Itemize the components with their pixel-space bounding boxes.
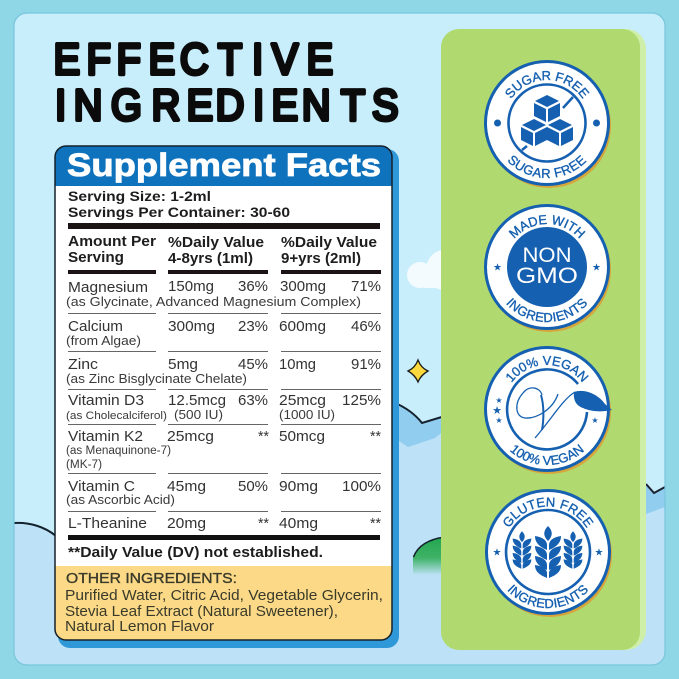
row: zinc: 45% bbox=[238, 356, 268, 373]
serving info bbox=[68, 188, 290, 220]
badge: vegan: 100% VEGAN bbox=[510, 444, 584, 466]
icon: crossed-out sugar cubes bbox=[521, 95, 573, 150]
other ingredients: Natural Lemon Flavor bbox=[65, 618, 214, 635]
icon: stars: ★ bbox=[492, 405, 502, 417]
panel: supplement facts label bbox=[55, 146, 399, 648]
row: l-theanine bbox=[68, 515, 381, 532]
badge: non gmo: ★ bbox=[592, 262, 601, 274]
badge: non gmo: MADE WITH bbox=[508, 214, 586, 238]
row: zinc: 5mg bbox=[168, 356, 198, 373]
row: vitamin k2: Vitamin K2 bbox=[68, 428, 143, 445]
badge: non gmo bbox=[484, 204, 611, 332]
row: calcium: 600mg bbox=[279, 318, 326, 335]
row: l-theanine: ** bbox=[370, 515, 381, 532]
badge: sugar free: SUGAR FREE bbox=[508, 154, 587, 178]
row: l-theanine: ** bbox=[258, 515, 269, 532]
row: magnesium: 150mg bbox=[168, 278, 214, 295]
table header: Amount Per bbox=[68, 233, 156, 250]
badge: non gmo: NON bbox=[522, 244, 571, 267]
panel: green badges column bbox=[441, 29, 646, 650]
badge: non gmo: GMO bbox=[516, 263, 578, 288]
hill bbox=[413, 538, 441, 574]
row: zinc bbox=[66, 356, 381, 386]
badge: sugar free: SUGAR FREE bbox=[506, 70, 590, 99]
heading: supplement facts: Supplement Facts bbox=[67, 147, 381, 183]
row: calcium: 300mg bbox=[168, 318, 215, 335]
icon: v with leaf bbox=[517, 388, 612, 438]
other ingredients: Stevia Leaf Extract (Natural Sweetener), bbox=[65, 603, 338, 620]
serving info: Servings Per Container: 30-60 bbox=[68, 204, 290, 220]
row: vitamin d3: (as Cholecalciferol) bbox=[66, 410, 167, 422]
other ingredients: Purified Water, Citric Acid, Vegetable Glycerin, bbox=[65, 587, 383, 604]
row: vitamin d3: (500 IU) bbox=[174, 407, 223, 422]
title: EFFECTIVE bbox=[54, 34, 333, 83]
table header: %Daily Value bbox=[281, 234, 377, 251]
badge: non gmo: INGREDIENTS bbox=[506, 298, 587, 322]
row: zinc: 10mg bbox=[279, 356, 316, 373]
row: vitamin k2: 50mcg bbox=[279, 428, 325, 445]
row: magnesium bbox=[66, 278, 381, 309]
title bbox=[54, 34, 398, 129]
row: zinc: 91% bbox=[351, 356, 381, 373]
row: vitamin d3: 12.5mcg bbox=[168, 392, 226, 409]
icon: stars bbox=[492, 396, 599, 425]
row: calcium: (from Algae) bbox=[66, 333, 141, 348]
row: vitamin c: 45mg bbox=[167, 478, 206, 495]
badge: vegan bbox=[484, 346, 612, 474]
row: vitamin c: Vitamin C bbox=[68, 478, 135, 495]
row: calcium: 23% bbox=[238, 318, 268, 335]
badge: sugar free bbox=[484, 60, 611, 188]
table header: %Daily Value bbox=[168, 234, 264, 251]
row: vitamin c: (as Ascorbic Acid) bbox=[66, 492, 175, 507]
row: vitamin d3: 25mcg bbox=[279, 392, 326, 409]
row: magnesium: 71% bbox=[351, 278, 381, 295]
row: magnesium: 36% bbox=[238, 278, 268, 295]
row: magnesium: Magnesium bbox=[68, 279, 148, 296]
row: vitamin d3: 63% bbox=[238, 392, 268, 409]
other ingredients bbox=[65, 570, 383, 635]
row: vitamin k2: 25mcg bbox=[167, 428, 214, 445]
footnote: **Daily Value (DV) not established. bbox=[68, 544, 323, 561]
table header: Serving bbox=[68, 249, 124, 266]
other ingredients: OTHER INGREDIENTS: bbox=[66, 570, 237, 587]
badge: gluten free: INGREDIENTS bbox=[508, 584, 588, 608]
title: INGREDIENTS bbox=[55, 80, 398, 129]
row: vitamin k2: (MK-7) bbox=[66, 459, 102, 471]
row: magnesium: 300mg bbox=[280, 278, 326, 295]
icon: stars: ★ bbox=[495, 416, 503, 425]
table header bbox=[68, 233, 377, 267]
row: vitamin d3 bbox=[66, 392, 381, 422]
row: l-theanine: L-Theanine bbox=[68, 515, 147, 532]
row: l-theanine: 20mg bbox=[167, 515, 206, 532]
badge: non gmo: ★ bbox=[493, 262, 502, 274]
badge: vegan: 100% VEGAN bbox=[506, 356, 589, 382]
row: zinc: Zinc bbox=[68, 356, 99, 373]
badge: gluten free: ★ bbox=[493, 548, 502, 558]
table header: 4-8yrs (1ml) bbox=[168, 250, 253, 267]
row: vitamin d3: 125% bbox=[342, 392, 381, 409]
icon: wheat bbox=[513, 526, 582, 578]
row: vitamin k2 bbox=[66, 428, 381, 471]
row: vitamin k2: ** bbox=[370, 428, 381, 445]
row: vitamin c: 90mg bbox=[279, 478, 318, 495]
icon: stars: ★ bbox=[591, 416, 599, 425]
icon: sparkle star bbox=[408, 360, 428, 382]
row: zinc: (as Zinc Bisglycinate Chelate) bbox=[66, 371, 247, 386]
badge: gluten free: GLUTEN FREE bbox=[504, 497, 594, 528]
table header: 9+yrs (2ml) bbox=[281, 250, 361, 267]
row: vitamin k2: (as Menaquinone-7) bbox=[66, 445, 171, 457]
row: vitamin d3: (1000 IU) bbox=[279, 407, 335, 422]
row: vitamin d3: Vitamin D3 bbox=[68, 392, 144, 409]
row: vitamin c: 100% bbox=[342, 478, 381, 495]
row: magnesium: (as Glycinate, Advanced Magnesium Complex) bbox=[66, 294, 361, 309]
serving info: Serving Size: 1-2ml bbox=[68, 188, 211, 204]
badge: gluten free bbox=[485, 489, 612, 617]
row: vitamin k2: ** bbox=[258, 428, 269, 445]
row: calcium: Calcium bbox=[68, 318, 123, 335]
row: l-theanine: 40mg bbox=[279, 515, 318, 532]
cloud bbox=[407, 250, 441, 290]
row: vitamin c bbox=[66, 478, 381, 507]
icon: stars: ★ bbox=[495, 396, 503, 405]
row: calcium bbox=[66, 318, 381, 348]
row: vitamin c: 50% bbox=[238, 478, 268, 495]
badge: gluten free: ★ bbox=[595, 548, 604, 558]
row: calcium: 46% bbox=[351, 318, 381, 335]
